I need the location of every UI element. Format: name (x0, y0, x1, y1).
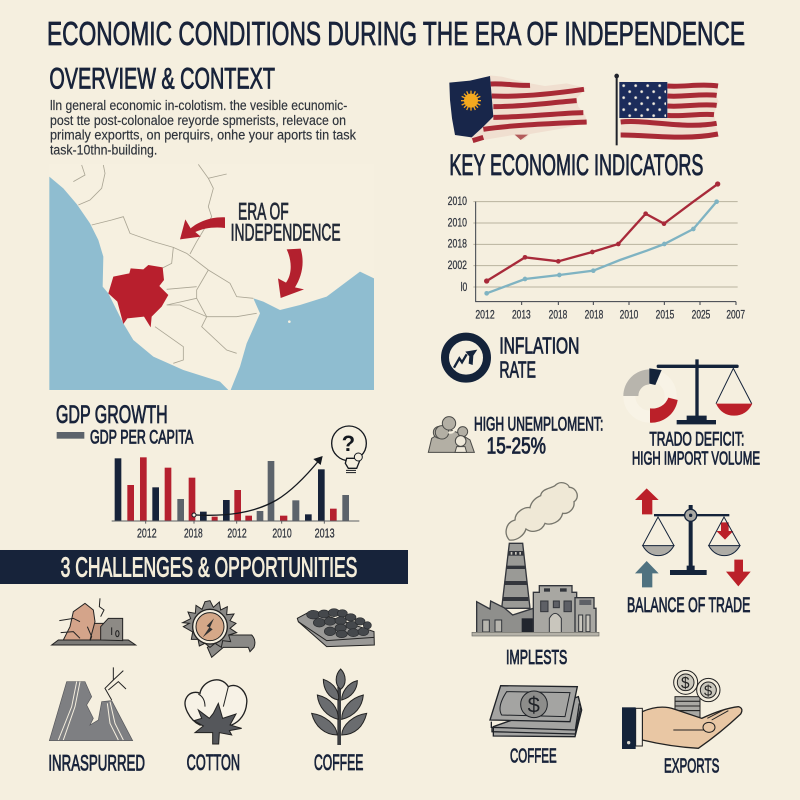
icon: people group (428, 417, 474, 452)
icon: rubble (52, 598, 136, 645)
label: trade deficit (632, 429, 760, 469)
panel: gdp growth (0, 401, 408, 584)
banner: challenges and opportunities (0, 550, 408, 584)
text block: overview body: primaly exportts, on perquirs, onhe your aports tin task (50, 128, 356, 143)
red series (484, 181, 720, 284)
icon: question bulb (332, 426, 366, 473)
label: inflation rate (499, 332, 579, 383)
bar chart: 2013 (315, 527, 335, 541)
icon: factory (472, 483, 599, 636)
line chart (448, 181, 745, 321)
line chart: 2010 (620, 307, 639, 321)
line chart: 2010 (448, 215, 467, 229)
line chart: 2018 (585, 307, 604, 321)
label: coffee: COFFEE (314, 750, 363, 775)
panel: overview and context (49, 62, 374, 390)
label: inraspurred: INRASPURRED (48, 750, 145, 775)
icon: coffee plant (312, 669, 367, 745)
bar chart: 2012 (227, 527, 247, 541)
panel: flags and indicators (448, 74, 745, 321)
smoke (506, 483, 577, 540)
label: trade deficit: TRADO DEFICIT: (649, 429, 744, 450)
label: high unemployment (474, 415, 603, 458)
bar chart: 2012 (137, 527, 157, 541)
text block: overview body: lln general economic in-colotism. the vesible ecunomic- (50, 98, 347, 113)
icon: cash stack: $ (528, 692, 540, 717)
icon: hand with coins: $ (681, 675, 690, 692)
arrow: growth curve (192, 456, 323, 517)
icon: hand with coins (622, 670, 742, 749)
heading: overview: OVERVIEW & CONTEXT (49, 62, 275, 95)
line chart: 2010 (448, 194, 467, 208)
icon: scale with red pan (657, 359, 752, 424)
label: exports: EXPORTS (664, 754, 719, 777)
icon: torn striped flag (449, 75, 587, 142)
label: cotton: COTTON (187, 750, 240, 775)
text block: overview body: task-10thn-building. (50, 142, 157, 157)
panel: exports and money (490, 646, 742, 777)
bar chart: 2018 (184, 527, 203, 541)
line chart: 2018 (448, 237, 467, 251)
panel: challenges icons (48, 598, 374, 775)
chart: trade deficit donut (623, 368, 678, 423)
icon: cotton gear (183, 601, 255, 657)
highlighted country (108, 265, 168, 327)
line chart: 2018 (549, 307, 568, 321)
line chart: 2025 (692, 307, 711, 321)
line chart: l0 (461, 280, 468, 294)
map label: ERA OF (238, 198, 289, 225)
label: inflation rate: RATE (499, 357, 536, 383)
text block: overview body: post tte post-colonaloe reyorde spmerists, relevace on (50, 113, 346, 128)
map (49, 164, 374, 390)
bar chart: 2010 (272, 527, 292, 541)
text block: overview body (50, 98, 356, 157)
icon: american flag (614, 74, 719, 145)
icon: hand with coins: $ (704, 684, 712, 700)
icon: balance scale with arrows (635, 488, 751, 587)
bar chart (112, 457, 359, 541)
icon: question bulb: ? (342, 431, 355, 456)
arrow: red left (180, 217, 225, 239)
panel: indicators and trade (428, 332, 760, 636)
icon: cotton boll (185, 680, 247, 744)
line chart: 2013 (512, 307, 531, 321)
label: high unemployment: HIGH UNEMPLOMENT: (474, 415, 603, 436)
line chart: 2015 (656, 307, 675, 321)
line chart: 2007 (726, 307, 745, 321)
legend: gdp per capita: GDP PER CAPITA (90, 428, 193, 449)
map label (231, 198, 341, 246)
icon: cash stack (490, 686, 582, 737)
line chart: 2012 (475, 307, 495, 321)
map label: INDEPENDENCE (231, 219, 341, 246)
heading: gdp growth: GDP GROWTH (56, 401, 168, 429)
icon: cracked road (49, 667, 133, 741)
banner: challenges and opportunities: 3 CHALLENGES & OPPORTUNITIES (61, 552, 357, 583)
label: high unemployment: 15-25% (487, 432, 546, 458)
blue series (484, 199, 719, 296)
arrow: red down (278, 249, 304, 298)
icon: coffee tray (297, 609, 374, 647)
label: inflation rate: INFLATION (499, 332, 579, 358)
label: implests: IMPLESTS (506, 646, 567, 669)
legend: gdp per capita (57, 428, 193, 449)
label: coffee money: COFFEE (510, 744, 557, 767)
icon: inflation gauge (445, 337, 487, 379)
line chart: 2002 (448, 258, 467, 272)
